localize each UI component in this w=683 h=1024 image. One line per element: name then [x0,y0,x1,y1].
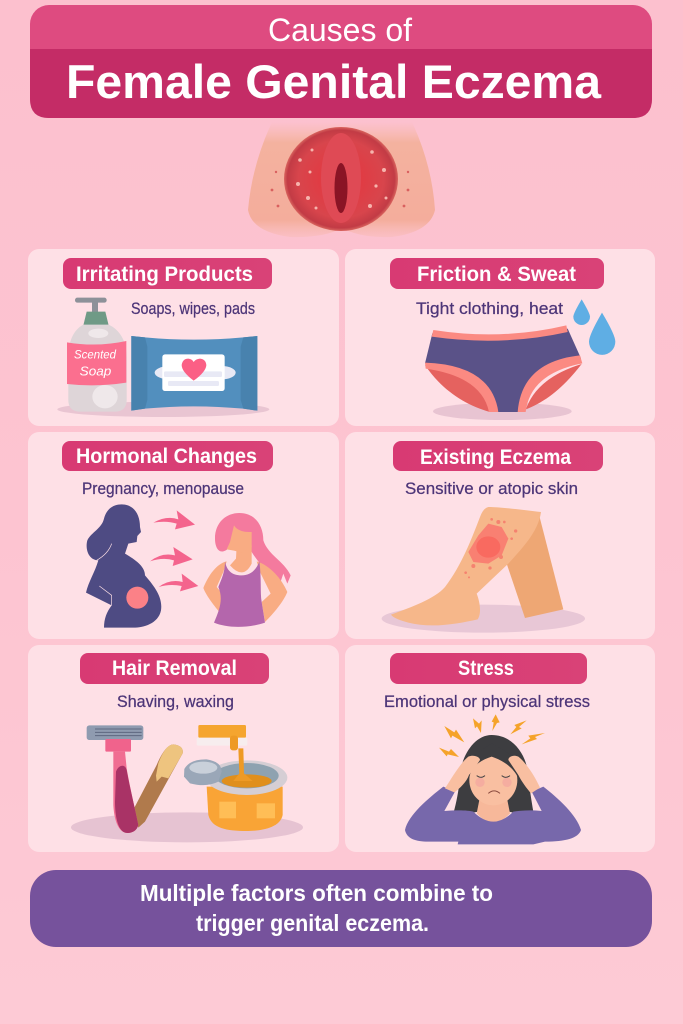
panel: friction and sweat [345,249,655,426]
icon: leg with eczema patch [382,507,585,633]
heading pill: friction and sweat: Friction & Sweat [417,263,576,286]
panel: hair removal [28,645,339,852]
heading pill: friction and sweat [390,258,604,289]
text: soaps, wipes, pads: Soaps, wipes, pads [131,299,255,318]
heading pill: hair removal [80,653,269,684]
panel: stress [345,645,655,852]
callout text line 2: trigger genital eczema. [196,910,429,936]
callout text line 1: Multiple factors often combine to [140,880,493,906]
icon: razor, spatula and wax pot [71,725,303,842]
title line: Causes of: Causes of [268,12,412,48]
icon: scented soap and wipes: Soap [80,364,111,378]
heading pill: hormonal changes [62,441,273,471]
heading pill: hormonal changes: Hormonal Changes [76,445,257,468]
icon: underwear with sweat drops [425,299,615,420]
title line: Female Genital Eczema: Female Genital Eczema [66,55,602,108]
icon: stressed woman with lightning bolts [405,714,581,844]
heading pill: irritating products [63,258,272,289]
panel: existing eczema [345,432,655,639]
text: tight clothing, heat: Tight clothing, heat [416,299,563,318]
callout: bottom banner [30,870,652,947]
heading pill: existing eczema: Existing Eczema [420,446,571,469]
icon: pregnancy to menopause silhouettes [86,504,291,628]
heading pill: hair removal: Hair Removal [112,657,237,680]
heading pill: stress [390,653,587,684]
icon: inflamed skin illustration [248,122,435,237]
icon: scented soap and wipes: Scented [74,348,116,362]
panel: hormonal changes [28,432,339,639]
text: shaving, waxing: Shaving, waxing [117,692,234,711]
panel: irritating products [28,249,339,426]
heading pill: irritating products: Irritating Products [76,263,253,286]
text: emotional or physical stress: Emotional or physical stress [384,692,590,711]
icon: scented soap and wipes [57,298,269,417]
heading pill: existing eczema [393,441,603,471]
text: sensitive or atopic skin: Sensitive or atopic skin [405,479,578,498]
text: pregnancy, menopause: Pregnancy, menopause [82,479,244,498]
heading pill: stress: Stress [458,657,514,680]
title banner [30,5,652,118]
